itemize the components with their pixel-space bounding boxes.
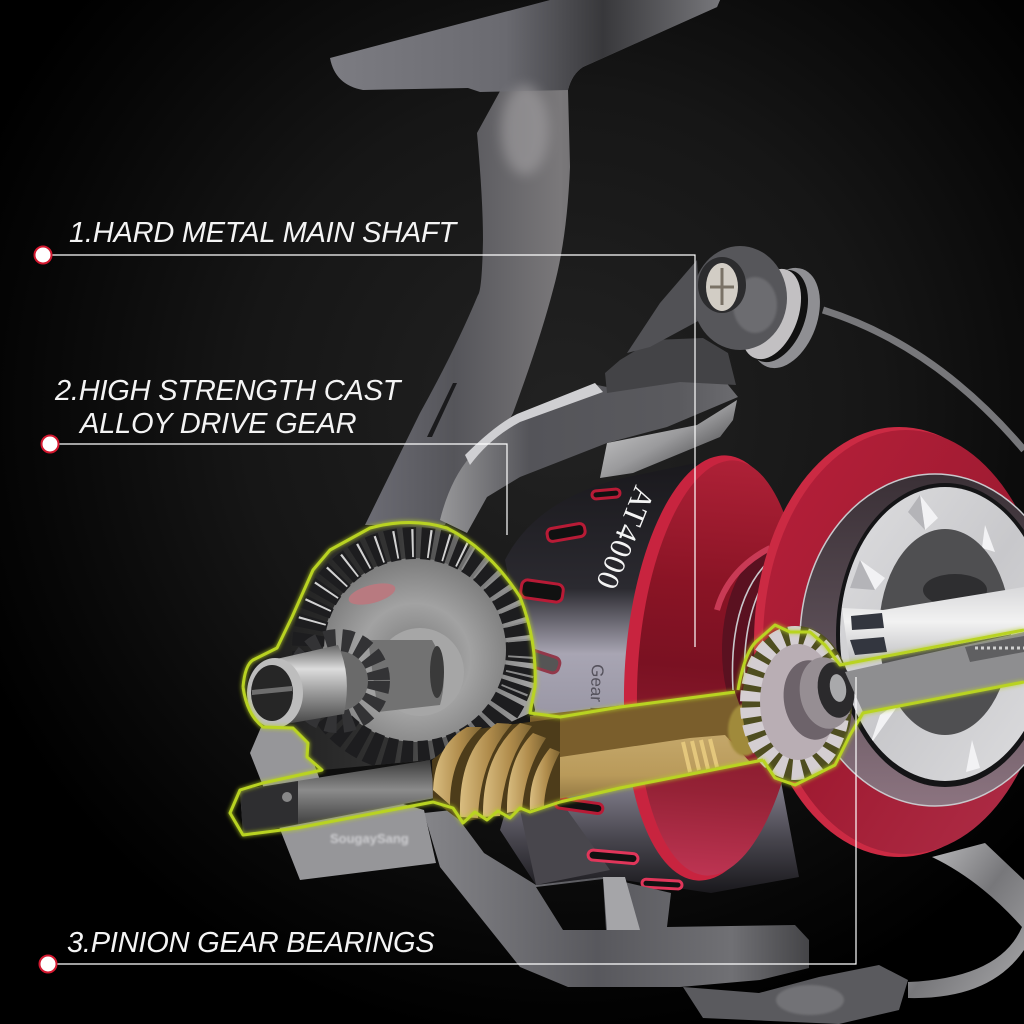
translucent housing tint bbox=[530, 692, 750, 760]
tooth highlights bbox=[312, 543, 468, 622]
main shaft left steel bbox=[240, 760, 435, 835]
silver gear side plate bbox=[250, 725, 436, 880]
spool bbox=[610, 427, 1024, 887]
arm underside bbox=[600, 400, 737, 478]
bearing bbox=[777, 656, 847, 744]
arm band bbox=[440, 375, 738, 533]
lower frame and foot bbox=[424, 810, 1024, 1024]
marker 3 bbox=[40, 956, 56, 972]
worm core bbox=[432, 718, 560, 822]
leader line 2 bbox=[50, 444, 507, 535]
screw bbox=[706, 263, 738, 311]
label 1: 1.HARD METAL MAIN SHAFT bbox=[69, 217, 459, 249]
reel stem and top foot bbox=[330, 0, 720, 525]
roller bearing bbox=[737, 258, 833, 378]
main shaft right bbox=[845, 632, 1024, 712]
neck bbox=[627, 260, 700, 353]
spool neck bbox=[722, 545, 838, 755]
bail arm and line roller bbox=[440, 246, 1024, 533]
worm threads bbox=[433, 727, 482, 805]
gold worm gear bbox=[432, 692, 762, 822]
rear flange bbox=[610, 449, 814, 887]
outline: gears and shaft bbox=[243, 522, 735, 717]
chrome bar bbox=[842, 587, 1024, 664]
brand mark on plate: SougaySang bbox=[330, 831, 409, 846]
barrel bbox=[272, 645, 347, 725]
tube opening bbox=[247, 658, 303, 728]
pinion gear right bbox=[742, 626, 859, 782]
marker 1 bbox=[34, 246, 52, 264]
marker 2 bbox=[42, 436, 58, 452]
spool model text: AT4000 bbox=[589, 481, 662, 595]
front flange bbox=[754, 427, 1024, 857]
roller knob bbox=[693, 246, 787, 350]
label 2 bbox=[54, 375, 403, 440]
screw recess bbox=[698, 257, 746, 313]
wire bail bbox=[823, 310, 1024, 450]
reel body bbox=[500, 458, 799, 893]
silver face bbox=[840, 487, 1024, 781]
label 2: ALLOY DRIVE GEAR bbox=[78, 408, 357, 440]
bevel teeth bbox=[308, 543, 522, 757]
leader line 3 bbox=[48, 677, 856, 964]
red reflection bbox=[348, 583, 396, 605]
inner rim bbox=[800, 474, 1024, 806]
pinion small gear bbox=[247, 641, 378, 728]
white highlight strip bbox=[465, 383, 603, 465]
gear disc bbox=[323, 558, 507, 742]
gear ratio text: Gear R bbox=[586, 664, 607, 719]
body rivet bbox=[672, 828, 736, 872]
yellow highlight outlines bbox=[230, 522, 1024, 835]
drive gear bbox=[240, 515, 540, 775]
label 2: 2.HIGH STRENGTH CAST bbox=[54, 375, 403, 407]
hub bbox=[390, 628, 464, 710]
label 3: 3.PINION GEAR BEARINGS bbox=[67, 927, 435, 959]
lower wire bail bbox=[908, 843, 1024, 998]
dark hub bbox=[879, 529, 1011, 735]
leader line 1 bbox=[43, 255, 695, 647]
gold shaft bbox=[540, 735, 750, 802]
cap bbox=[605, 338, 736, 393]
outline: pinion gear bbox=[738, 625, 1024, 690]
threaded end bbox=[683, 739, 717, 772]
end glow bbox=[728, 704, 762, 756]
red slots bbox=[515, 489, 682, 889]
lower foot bbox=[683, 965, 908, 1024]
